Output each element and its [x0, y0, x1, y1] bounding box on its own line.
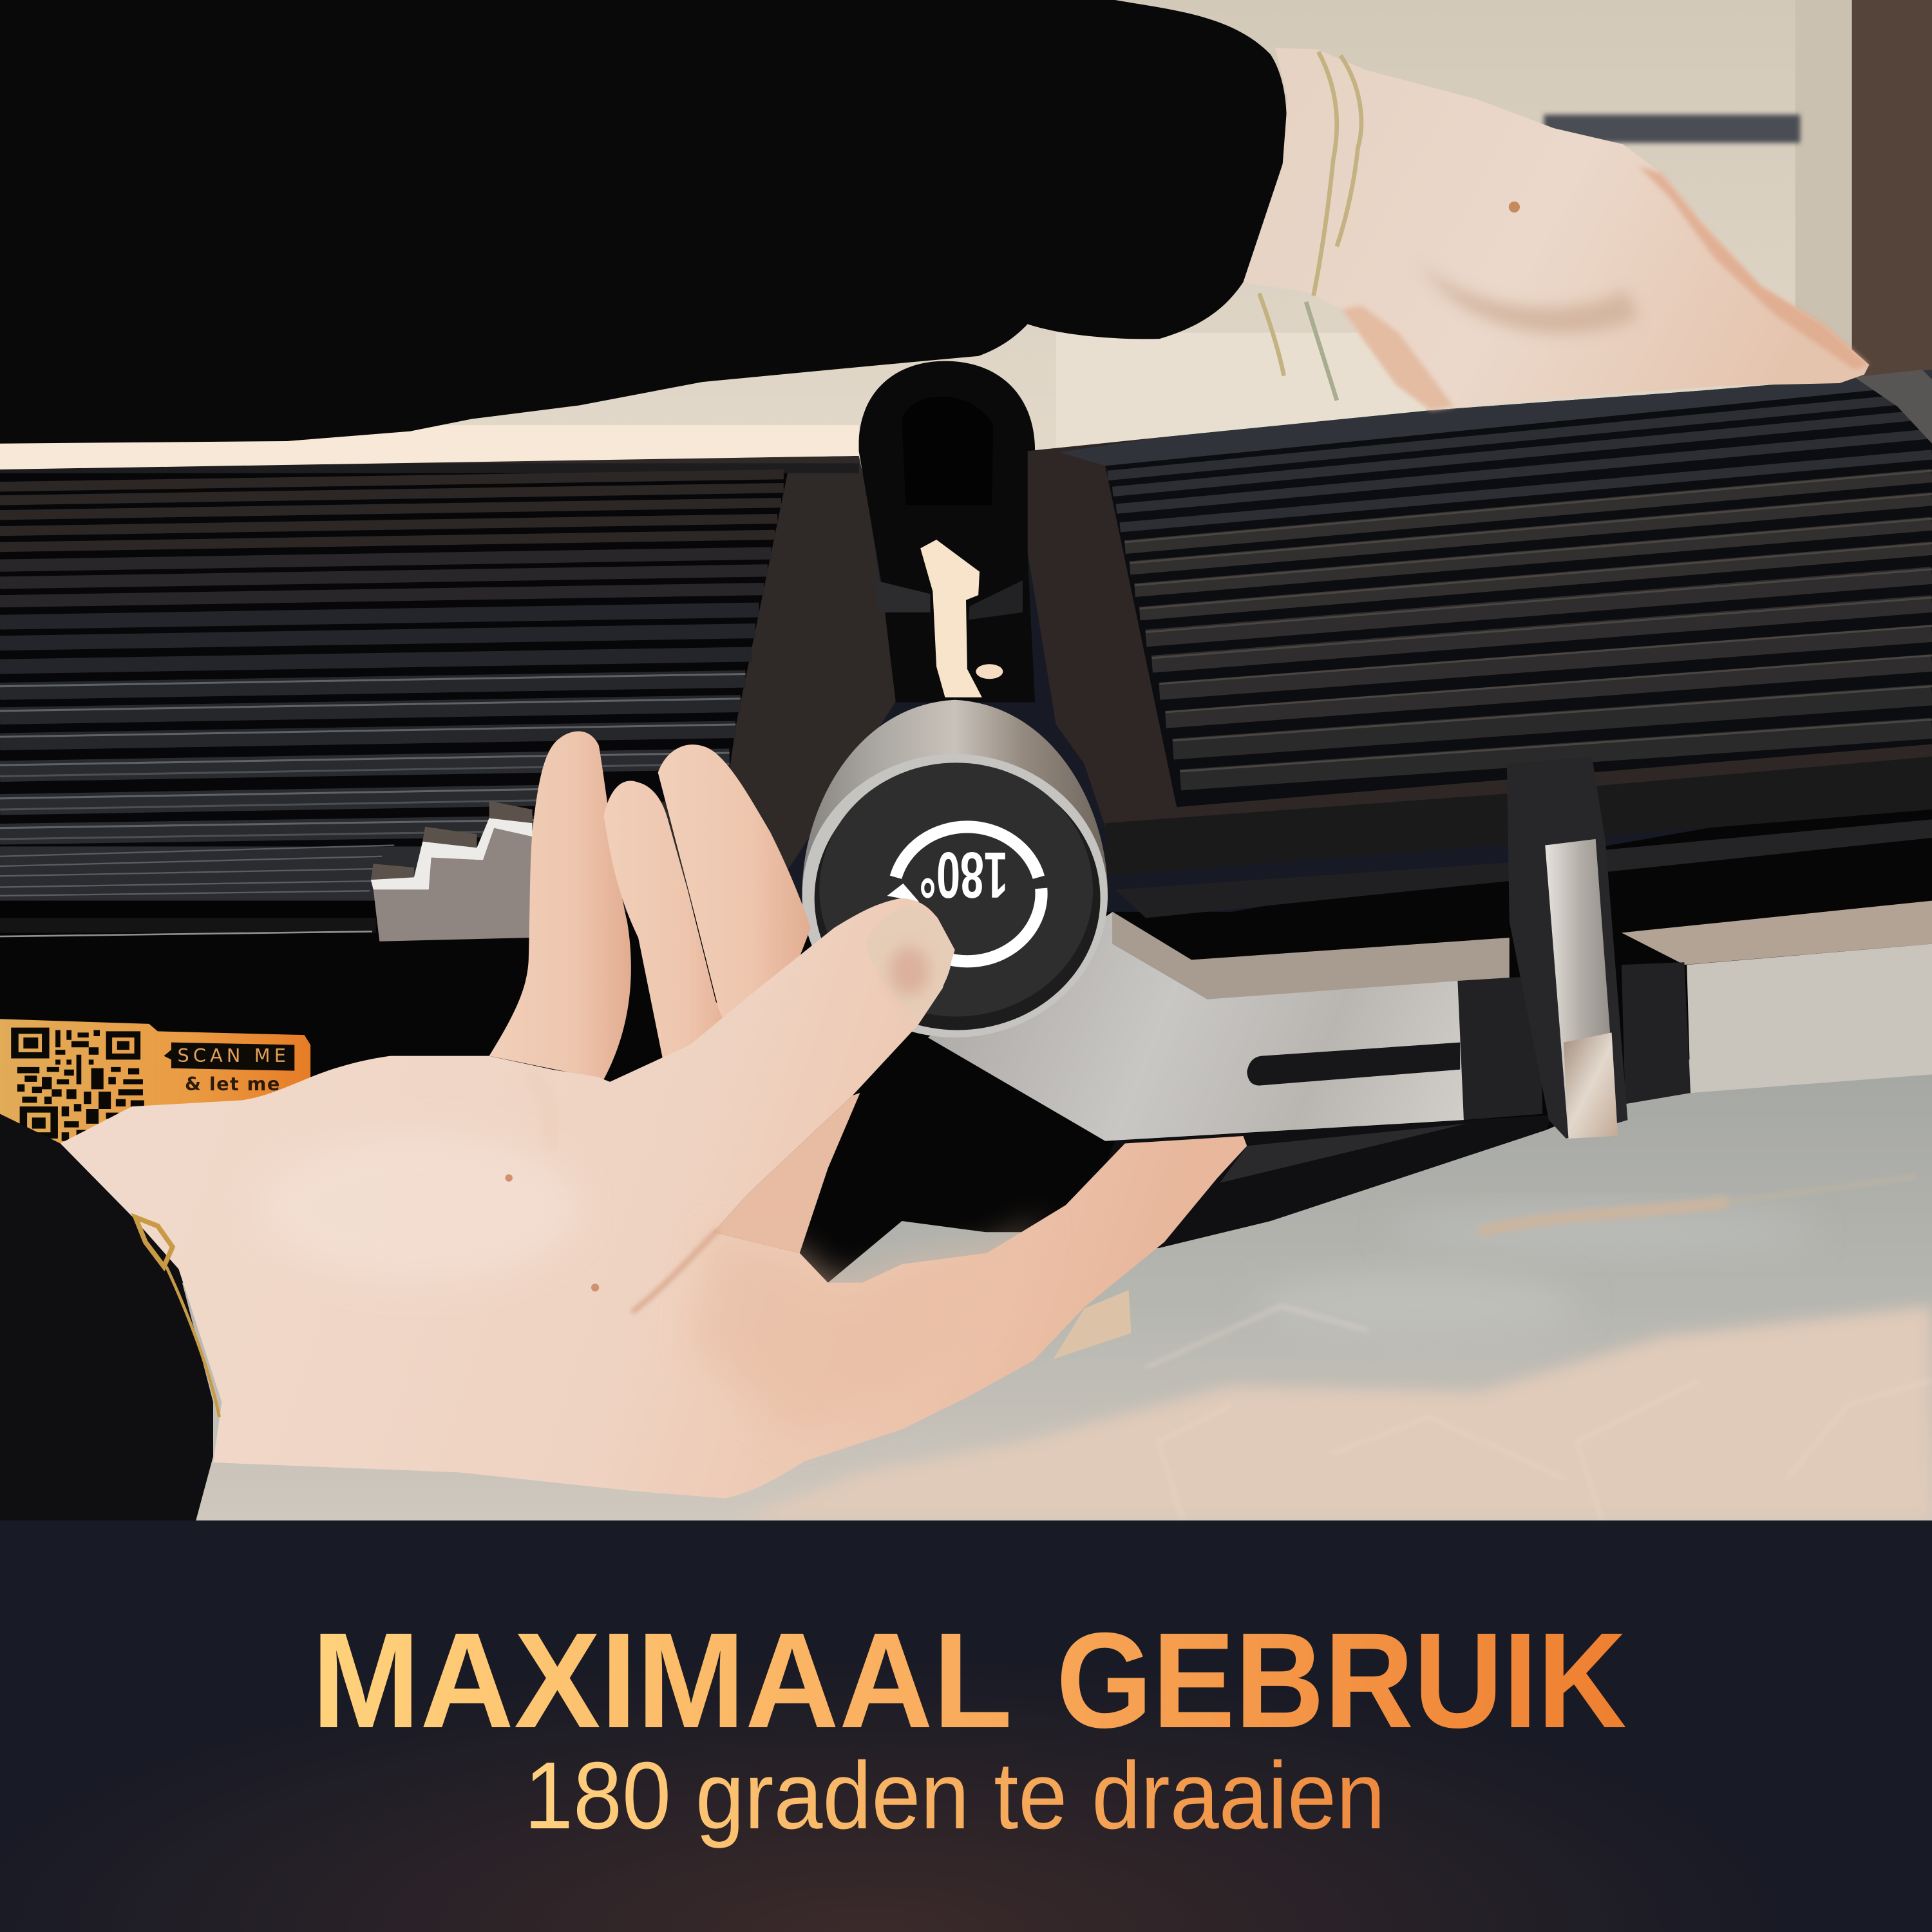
nail pink centre	[889, 946, 929, 996]
silver zigzag latch	[371, 801, 533, 942]
marble counter	[0, 1059, 1932, 1520]
upper right hand	[1243, 48, 1869, 410]
top rim of right plate	[1059, 370, 1932, 466]
heading: MAXIMAAL	[312, 1604, 1012, 1756]
photo: hand turning the grill knob	[0, 0, 1932, 1520]
raised finger three	[658, 744, 811, 1029]
latch dark steps	[371, 801, 533, 880]
rotation arrowhead	[887, 884, 919, 902]
bottom banner	[0, 1520, 1932, 1932]
front rim of the right plate	[1105, 757, 1932, 918]
steel insert	[1545, 839, 1618, 1139]
rotary knob	[802, 700, 1108, 1037]
latch bright zigzag	[371, 818, 533, 889]
steel corner of the right plate	[1854, 370, 1932, 444]
latch body	[374, 828, 533, 942]
light gap between the plates	[920, 540, 982, 697]
rotation ring upper arc	[896, 827, 1039, 877]
knob cylinder	[802, 700, 1108, 893]
QR sticker	[0, 1019, 310, 1152]
right grill plate	[1028, 370, 1932, 838]
main hand	[61, 732, 1247, 1499]
black handle clamps	[1457, 962, 1690, 1120]
thenar warm shading	[690, 1220, 1047, 1435]
back of hand warm edge	[1639, 166, 1869, 370]
raised finger one	[489, 732, 631, 1079]
QR code	[11, 1028, 144, 1141]
sticker text: & let me	[185, 1073, 279, 1095]
hand mole	[1509, 202, 1520, 213]
finger behind thumb	[714, 1093, 860, 1253]
rotation ring lower arc	[943, 888, 1041, 961]
stainless handle bar	[1622, 901, 1932, 1093]
wrist bracelet	[135, 1217, 220, 1417]
right plate ridges	[1108, 397, 1932, 780]
knob recess	[815, 766, 1101, 1030]
subheading: 180 graden te draaien	[524, 1743, 1385, 1849]
light counter strip under sleeve	[0, 425, 859, 469]
SCAN ME tag	[164, 1043, 294, 1071]
upper black sleeve	[0, 0, 1287, 444]
handle arm with bevel	[928, 912, 1510, 1141]
heading: GEBRUIK	[1056, 1604, 1627, 1756]
rotated 180 degree label: 180°	[919, 838, 1008, 911]
lower left plate slab	[0, 846, 542, 901]
left grill plate	[0, 456, 898, 936]
thumb nail	[866, 905, 952, 1020]
palm moles	[505, 1174, 599, 1291]
knob bezel	[802, 754, 1108, 1037]
hinge and centre gap	[819, 361, 1035, 813]
kitchen wall background	[0, 0, 1932, 493]
steel insert end	[1564, 1032, 1618, 1139]
handle slot	[1247, 1043, 1460, 1086]
bracelets	[1259, 52, 1361, 401]
palm, thumb and lower finger	[61, 898, 1247, 1499]
thumb crease	[632, 1229, 718, 1312]
SCAN ME label: SCAN ME	[178, 1045, 286, 1066]
knuckle shadow	[530, 1072, 552, 1152]
left plate ridges	[0, 475, 784, 839]
knob face	[819, 762, 1093, 1016]
lower edge warm	[1342, 305, 1454, 410]
grill stand	[1084, 1115, 1553, 1248]
palm highlight	[259, 1133, 579, 1282]
lower left sleeve	[0, 1114, 213, 1520]
grill body	[0, 788, 1932, 1283]
raised finger two	[604, 781, 739, 1072]
handle lock with steel insert	[1507, 757, 1627, 1139]
hand fold shadow	[1417, 261, 1639, 334]
